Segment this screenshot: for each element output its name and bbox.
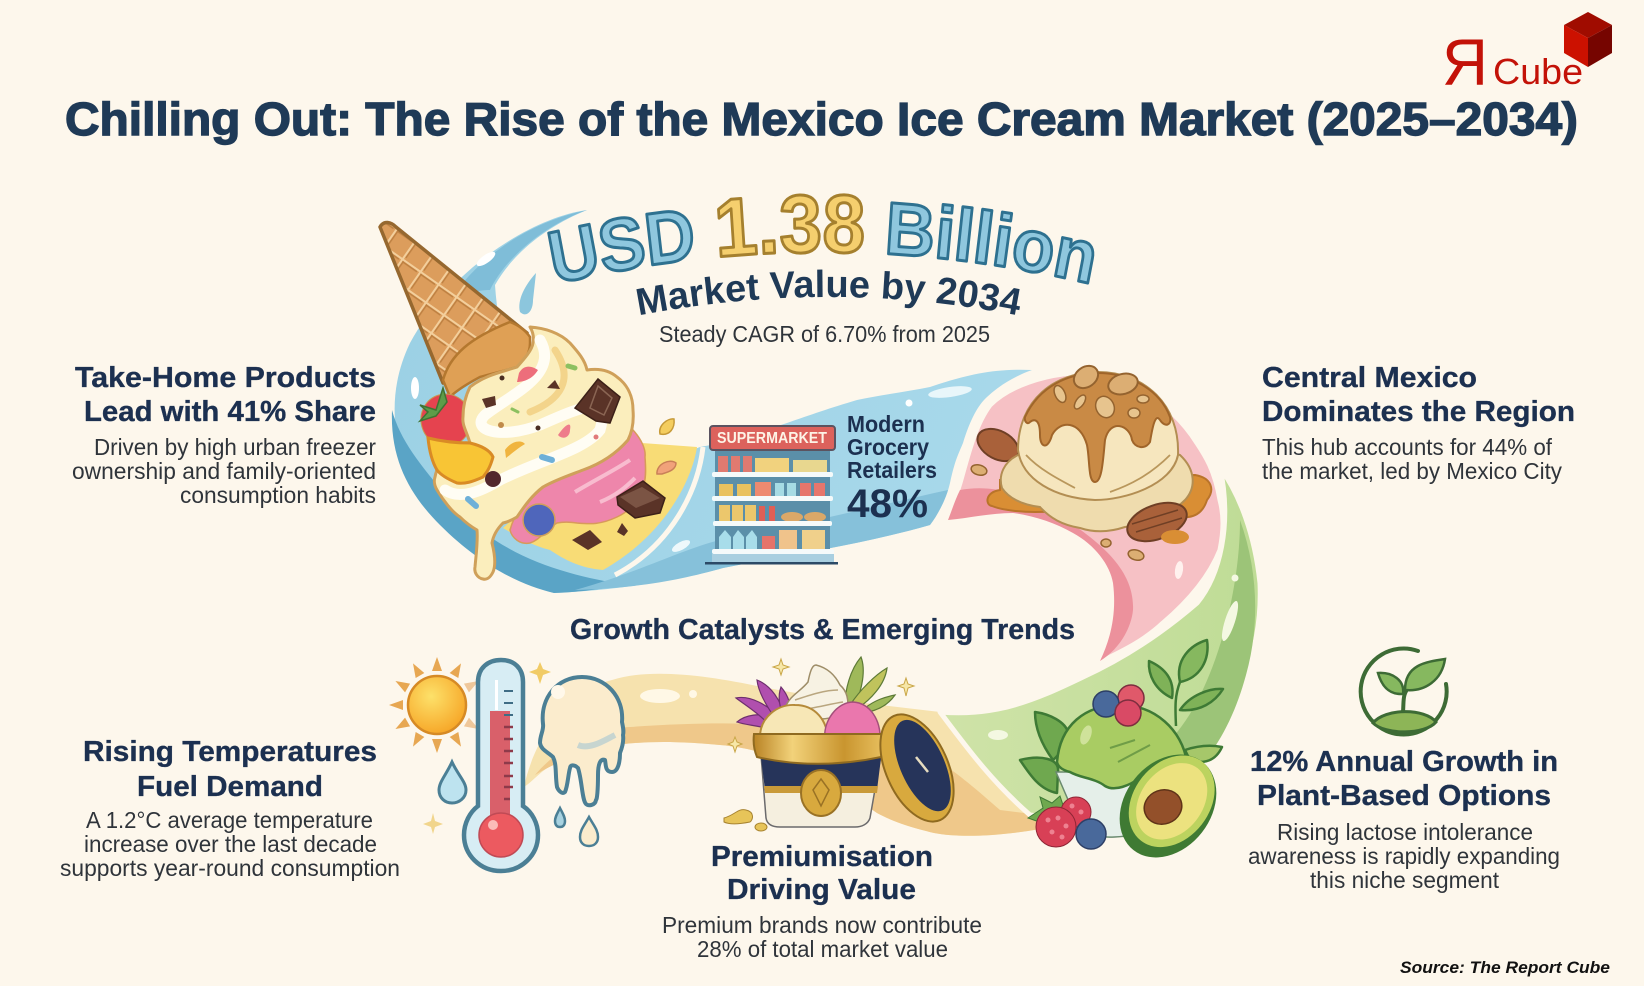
heading: Driving Value — [727, 874, 916, 906]
ribbon: tan wave — [524, 674, 1040, 836]
text block: rising temperatures — [60, 736, 400, 881]
heading: Dominates the Region — [1262, 396, 1575, 428]
matcha scoop — [1057, 705, 1187, 788]
icon: pecan caramel scoop — [970, 361, 1211, 562]
body: this niche segment — [1310, 867, 1500, 893]
berries on top — [1118, 685, 1144, 711]
sprinkles — [468, 366, 575, 506]
pink scoop — [510, 430, 646, 543]
ice cream dome — [1018, 372, 1178, 500]
heading: Plant-Based Options — [1257, 780, 1551, 812]
ribbon: blue swoosh — [392, 210, 1032, 593]
heading — [1262, 362, 1575, 428]
swirl cream — [434, 327, 633, 579]
logo wordmark — [1442, 25, 1583, 99]
blueberry — [523, 504, 555, 536]
ribbon: green wave — [940, 467, 1260, 830]
pecan left — [972, 422, 1024, 468]
icon: small melt drops — [555, 808, 598, 846]
body: ownership and family-oriented — [72, 458, 376, 484]
lid — [865, 703, 969, 833]
heading: Take-Home Products — [75, 362, 376, 394]
icon: thermometer — [464, 660, 538, 871]
body — [1262, 434, 1562, 484]
heading: Fuel Demand — [137, 771, 323, 803]
waffle cone — [380, 222, 527, 383]
icon: sparkle gold — [529, 662, 551, 684]
body — [662, 912, 982, 962]
whipped swirl — [785, 665, 848, 719]
gold crumbs — [724, 810, 753, 824]
body: awareness is rapidly expanding — [1248, 843, 1560, 869]
logo: RCube — [1442, 12, 1612, 99]
icon: sun — [389, 657, 481, 753]
purple flower — [736, 680, 791, 730]
heading — [711, 841, 933, 906]
heading: Lead with 41% Share — [84, 396, 376, 428]
heading: Central Mexico — [1262, 362, 1477, 394]
leaves — [845, 657, 895, 712]
orange slice — [428, 438, 493, 483]
headline: USD 1.38 Billion: USD 1.38 Billion — [547, 193, 1094, 285]
nuts on top — [1070, 361, 1102, 393]
icon: melting scoop — [540, 677, 623, 805]
strawberry — [415, 388, 477, 452]
avocado — [1100, 735, 1236, 877]
stat: modern grocery retailers — [847, 411, 937, 526]
sparkles — [773, 659, 789, 675]
vanilla scoop — [760, 705, 828, 742]
flying droplets — [660, 419, 674, 434]
small chocolates — [572, 530, 602, 550]
heading: Rising Temperatures — [83, 736, 377, 768]
caramel sauce — [1025, 373, 1170, 482]
body: Driven by high urban freezer — [94, 434, 376, 460]
pink scoop — [825, 702, 880, 742]
body: Premium brands now contribute — [662, 912, 982, 938]
body: This hub accounts for 44% of — [1262, 434, 1553, 460]
chocolate chunk lower — [617, 481, 665, 518]
logo wordmark: Я — [1442, 25, 1488, 99]
body — [60, 807, 400, 881]
subhead: Market Value by 2034: Market Value by 2034 — [636, 270, 1020, 315]
cherry — [485, 471, 501, 487]
source note: Source: The Report Cube — [1400, 958, 1610, 977]
tub rim — [754, 734, 883, 764]
text block: plant-based — [1248, 746, 1560, 893]
stat: modern grocery retailers: Retailers — [847, 457, 937, 483]
tub body — [761, 755, 881, 827]
body: supports year-round consumption — [60, 855, 400, 881]
raspberries — [1028, 796, 1064, 824]
text: CAGR note: Steady CAGR of 6.70% from 2025 — [659, 321, 990, 347]
icon: water drop — [439, 762, 466, 803]
body: Rising lactose intolerance — [1277, 819, 1533, 845]
text: supermarket sign: SUPERMARKET — [717, 430, 827, 447]
leaf sprig — [1149, 640, 1223, 726]
text block: take-home products — [72, 362, 376, 508]
body: increase over the last decade — [84, 831, 377, 857]
logo wordmark: Cube — [1493, 51, 1583, 92]
caramel puddle — [987, 475, 1211, 517]
heading — [75, 362, 376, 428]
icon: waffle cone sundae — [380, 222, 676, 579]
heading — [83, 736, 377, 803]
medallion — [801, 770, 841, 816]
icon: matcha bowl with avocado — [1020, 640, 1236, 877]
ice cream base — [1001, 430, 1193, 531]
pecan right — [1122, 495, 1192, 549]
heading: Premiumisation — [711, 841, 933, 873]
stat: modern grocery retailers: Modern — [847, 411, 925, 437]
logo cube — [1564, 12, 1612, 67]
body — [1248, 819, 1560, 893]
heading — [1250, 746, 1558, 812]
heading: growth catalysts: Growth Catalysts & Emerging Trends — [570, 614, 1075, 646]
side leaves — [1020, 712, 1222, 793]
stat: modern grocery retailers: Grocery — [847, 434, 929, 460]
icon: supermarket shelf — [705, 426, 838, 564]
text block: premiumisation — [662, 841, 982, 962]
body: consumption habits — [180, 482, 376, 508]
cone rim — [443, 322, 530, 397]
body: 28% of total market value — [697, 936, 948, 962]
icon: sprout in circle — [1361, 649, 1447, 735]
heading: 12% Annual Growth in — [1250, 746, 1558, 778]
ribbon: pink wave — [945, 373, 1223, 663]
body: the market, led by Mexico City — [1262, 458, 1562, 484]
icon: premium ice cream tub — [724, 657, 969, 833]
yellow swoosh wedge — [503, 440, 697, 570]
stat: modern grocery retailers: 48% — [847, 482, 928, 526]
chocolate chunk top — [575, 379, 620, 423]
body: A 1.2°C average temperature — [86, 807, 373, 833]
bowl — [1056, 772, 1158, 837]
text block: central mexico — [1262, 362, 1575, 484]
body — [72, 434, 376, 508]
icon: sparkle gold small — [423, 813, 443, 834]
title: Chilling Out: The Rise of the Mexico Ice Cream Market (2025–2034) — [65, 93, 1578, 145]
